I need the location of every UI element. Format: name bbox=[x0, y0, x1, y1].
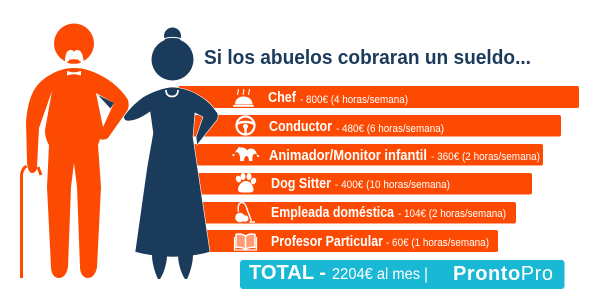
bar: Conductor: Conductor bbox=[269, 119, 332, 135]
bar: Profesor Particular bbox=[178, 230, 498, 252]
title: Si los abuelos cobraran un sueldo... bbox=[204, 46, 531, 69]
bar: Animador: - 360€ (2 horas/semana) bbox=[431, 151, 540, 163]
panel: total bbox=[240, 260, 564, 289]
icon: cloche bbox=[233, 89, 254, 107]
illustration: grandmother bbox=[124, 28, 218, 279]
bar: Empleada doméstica: Empleada doméstica bbox=[271, 205, 395, 221]
icon: paw bbox=[235, 173, 257, 193]
panel: total: 2204€ al mes | bbox=[332, 266, 428, 283]
bar: Profesor Particular: - 60€ (1 horas/semana) bbox=[386, 237, 489, 249]
bar: Animador: Animador/Monitor infantil bbox=[269, 148, 427, 164]
bar: Animador bbox=[178, 144, 543, 166]
bar: Chef bbox=[178, 86, 579, 108]
bar: Dog Sitter bbox=[178, 173, 532, 194]
bar: Conductor: - 480€ (6 horas/semana) bbox=[336, 123, 444, 135]
bar: Dog Sitter: - 400€ (10 horas/semana) bbox=[335, 179, 450, 191]
icon: vacuum cleaner bbox=[235, 202, 255, 222]
bar: Empleada doméstica: - 104€ (2 horas/semana) bbox=[398, 208, 506, 220]
bar: Empleada doméstica bbox=[178, 202, 516, 224]
bar: Chef: Chef bbox=[268, 90, 296, 106]
panel: total: TOTAL - bbox=[249, 262, 326, 284]
icon: jester hat bbox=[232, 147, 259, 161]
panel: total: ProntoPro bbox=[453, 263, 553, 285]
bar: Dog Sitter: Dog Sitter bbox=[271, 176, 331, 192]
bar: Chef: - 800€ (4 horas/semana) bbox=[300, 94, 408, 106]
illustration: grandfather bbox=[22, 24, 129, 278]
icon: open book bbox=[234, 234, 256, 250]
bar: Profesor Particular: Profesor Particular bbox=[271, 234, 383, 250]
icon: steering wheel bbox=[236, 116, 254, 134]
bar: Conductor bbox=[178, 115, 561, 136]
